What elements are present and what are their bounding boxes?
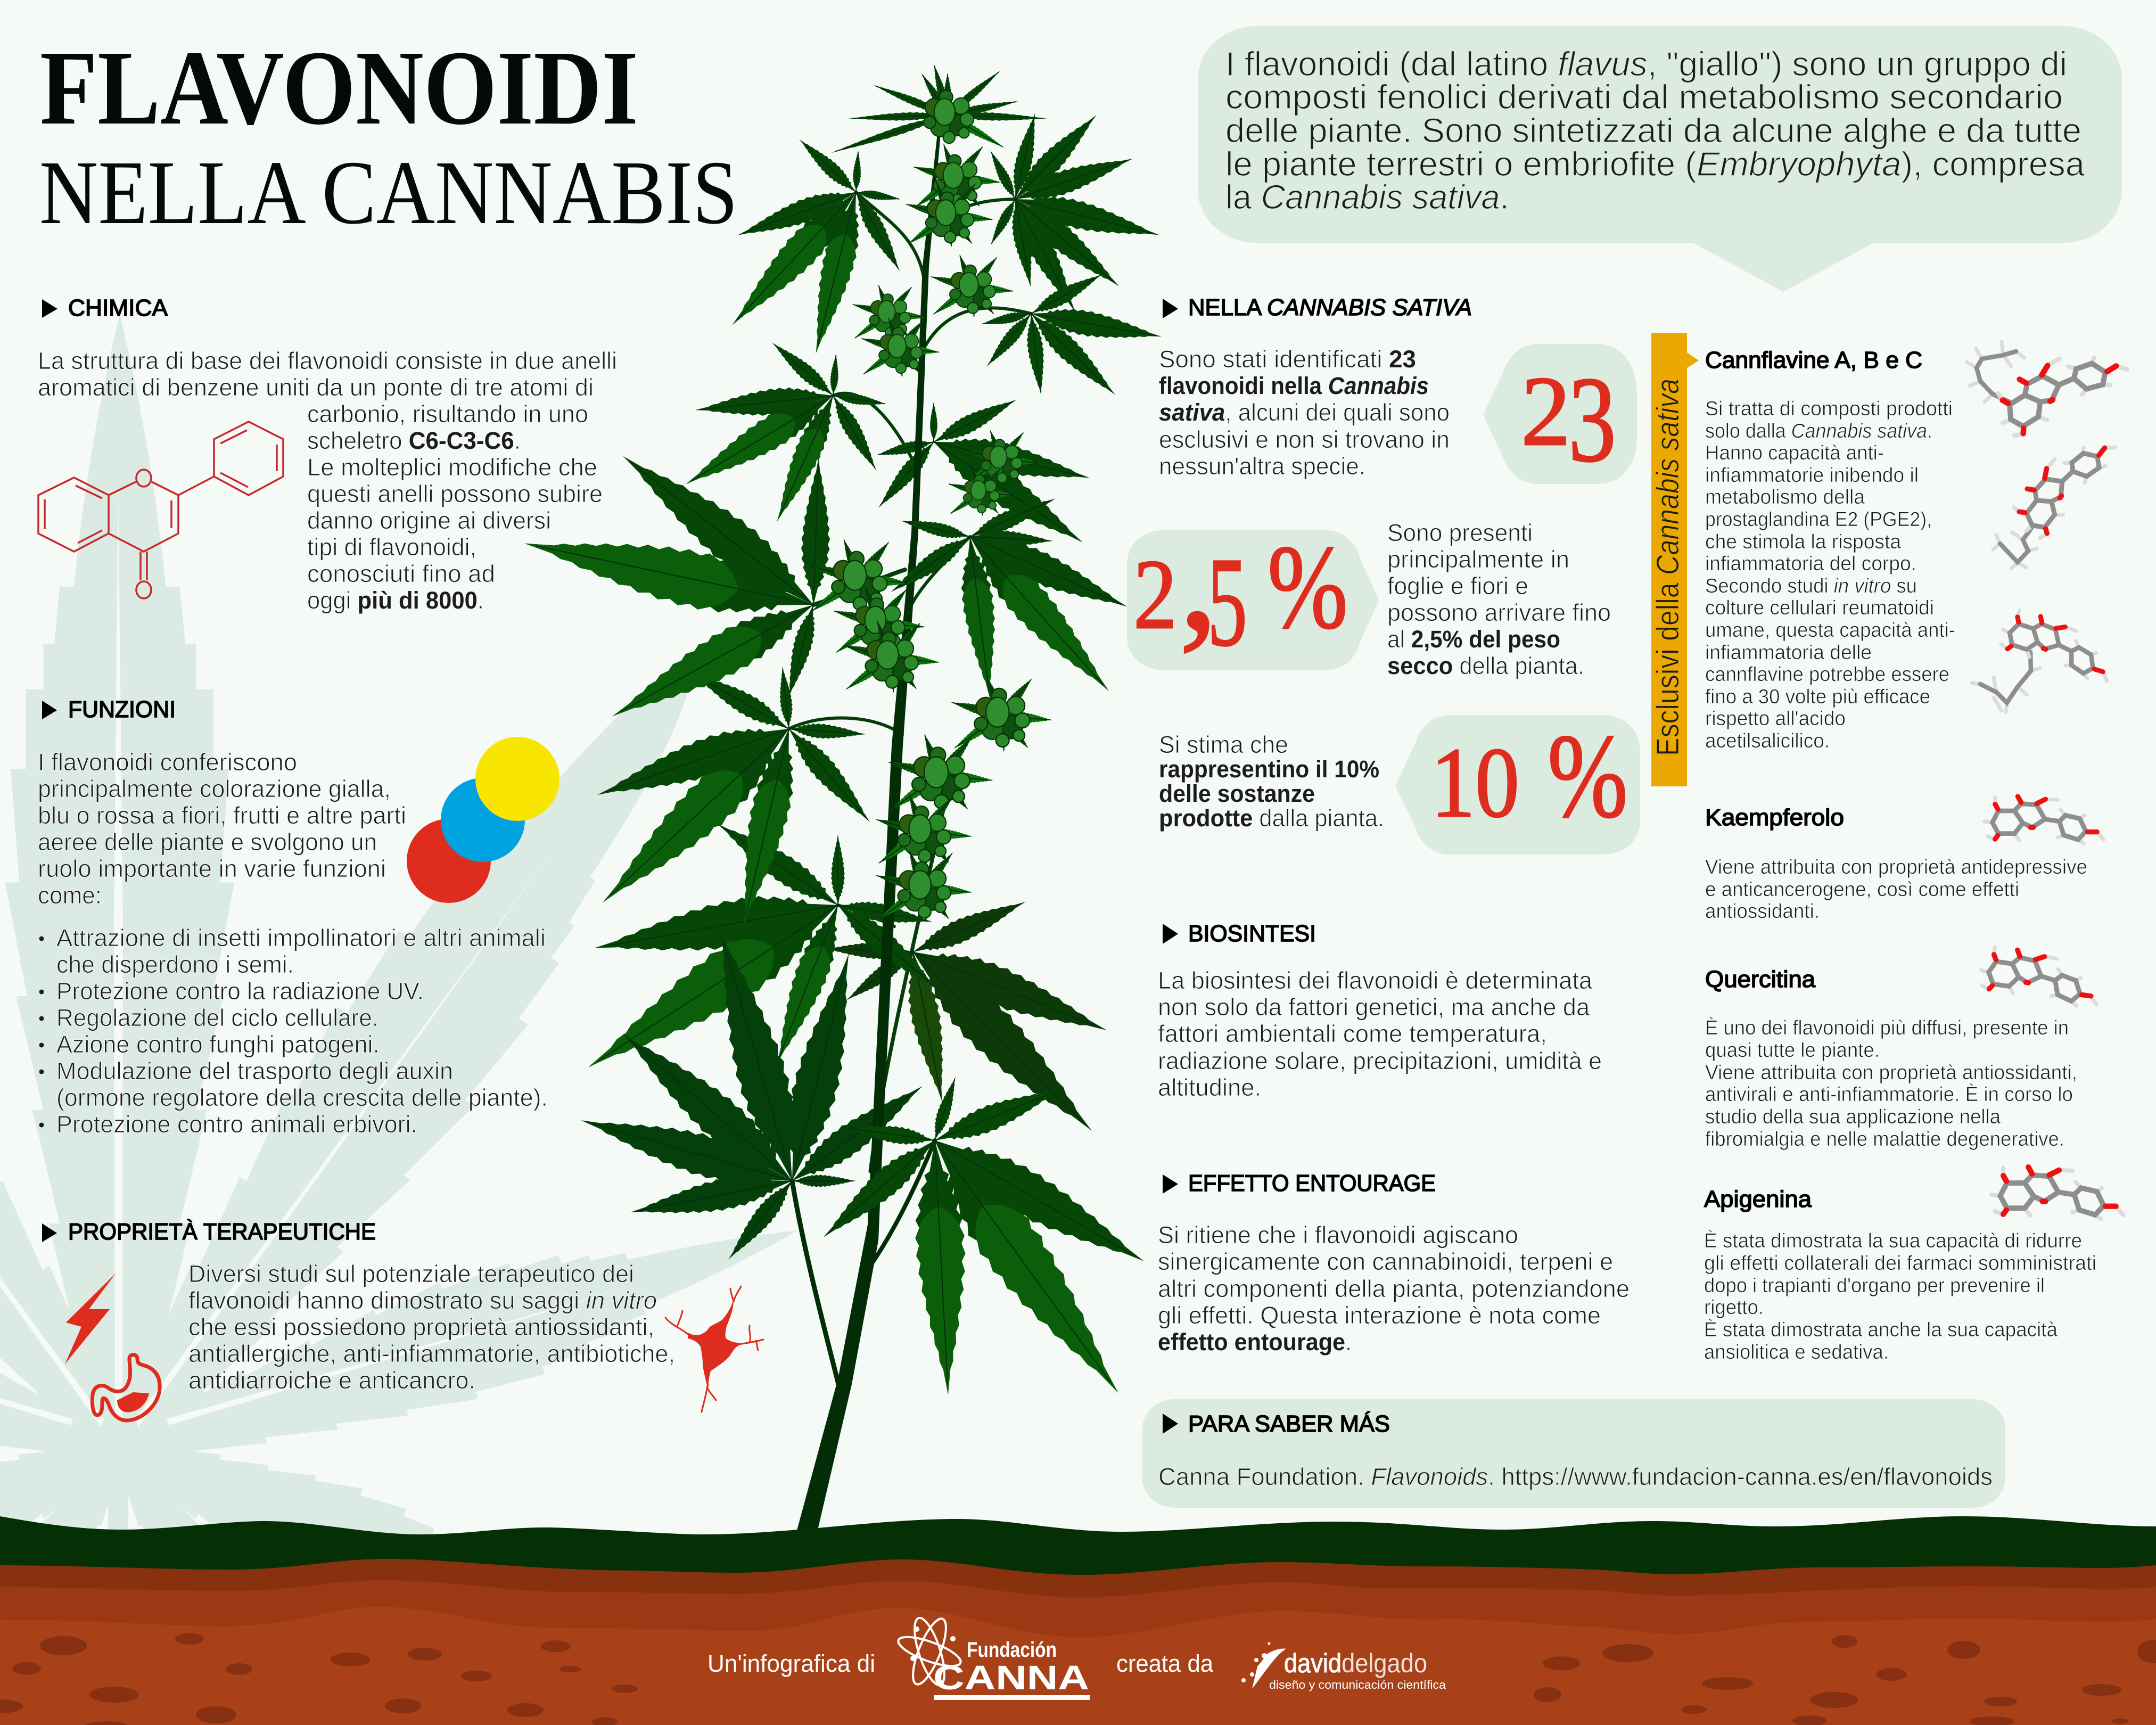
right column: cannflavine: Secondo studi in vitro su [1705, 575, 1917, 597]
title [39, 29, 738, 243]
molecule: apigenina [1992, 1167, 2123, 1219]
flower buds [807, 142, 1053, 924]
section: proprietà terapeutiche: PROPRIETÀ TERAPEUTICHE [68, 1219, 376, 1245]
title: FLAVONOIDI [40, 29, 638, 147]
section: chimica: scheletro C6-C3-C6. [307, 427, 521, 454]
section: nella cannabis sativa [1159, 294, 1472, 480]
intro speech bubble: I flavonoidi (dal latino flavus, "giallo") sono un gruppo di [1225, 45, 2067, 83]
section: funzioni: FUNZIONI [68, 696, 176, 722]
icon: colour circles [407, 737, 559, 903]
molecule: cannflavine A [1967, 328, 2129, 444]
section: funzioni [38, 696, 548, 1138]
section: biosintesi: altitudine. [1158, 1074, 1261, 1101]
section: effetto entourage [1158, 1170, 1630, 1356]
right column: cannflavine: fino a 30 volte più efficace [1705, 686, 1930, 708]
soil stones [0, 1633, 2156, 1725]
right column: quercitina [1705, 966, 2077, 1151]
section: effetto entourage: sinergicamente con cannabinoidi, terpeni e [1158, 1248, 1613, 1275]
text block: peso secco: Sono presenti [1387, 519, 1533, 546]
section: nella cannabis sativa: esclusivi e non si trovano in [1159, 426, 1450, 453]
right column: quercitina: Viene attribuita con proprietà antiossidanti, [1705, 1062, 2077, 1084]
callout: 23: 3 [1568, 351, 1616, 487]
text block: peso secco: principalmente in [1387, 546, 1569, 573]
right column: cannflavine: metabolismo della [1705, 486, 1865, 508]
right column: cannflavine: umane, questa capacità anti- [1705, 619, 1955, 642]
right column: cannflavine: acetilsalicilico. [1705, 730, 1830, 752]
text block: peso secco [1387, 519, 1611, 679]
right column: cannflavine: rispetto all'acido [1705, 708, 1846, 730]
text block: 10 percento [1159, 731, 1384, 832]
right column: cannflavine: infiammatoria del corpo. [1705, 553, 1916, 575]
section: chimica: carbonio, risultando in uno [307, 400, 588, 428]
main stem [796, 133, 941, 1532]
credits [707, 1650, 1214, 1677]
intro speech bubble: composti fenolici derivati dal metabolismo secondario [1225, 78, 2063, 116]
right column: apigenina: È stata dimostrata la sua capacità di ridurre [1704, 1229, 2082, 1252]
callout: 2,5 %: % [1268, 520, 1348, 653]
section: funzioni: (ormone regolatore della crescita delle piante). [56, 1084, 548, 1111]
callout: 23 [1483, 344, 1637, 487]
flavone skeleton diagram [38, 422, 283, 598]
callout: 2,5 % [1127, 486, 1379, 672]
right column: cannflavine: cannflavine potrebbe essere [1705, 663, 1949, 686]
section: effetto entourage: EFFETTO ENTOURAGE [1188, 1170, 1436, 1196]
right column: cannflavine: Cannflavine A, B e C [1705, 347, 1922, 373]
section: nella cannabis sativa: nessun'altra specie. [1159, 453, 1365, 480]
section: chimica: oggi più di 8000. [307, 587, 484, 614]
right column: cannflavine: solo dalla Cannabis sativa. [1705, 420, 1932, 442]
text block: peso secco: al 2,5% del peso [1387, 626, 1560, 653]
section: chimica: danno origine ai diversi [307, 507, 551, 534]
right column: cannflavine: che stimola la risposta [1705, 531, 1902, 553]
right column: apigenina: gli effetti collaterali dei farmaci somministrati [1704, 1252, 2096, 1275]
section: funzioni: Protezione contro la radiazione UV. [56, 978, 424, 1005]
right column: quercitina: quasi tutte le piante. [1705, 1039, 1880, 1062]
intro speech bubble: delle piante. Sono sintetizzati da alcune alghe e da tutte [1225, 111, 2081, 150]
section: proprietà terapeutiche: flavonoidi hanno dimostrato su saggi in vitro [188, 1287, 657, 1314]
section: chimica: CHIMICA [68, 295, 168, 321]
text block: peso secco: possono arrivare fino [1387, 599, 1611, 626]
section: biosintesi: fattori ambientali come temperatura, [1158, 1020, 1547, 1047]
ground layers [0, 1516, 2156, 1725]
section: funzioni: Attrazione di insetti impollinatori e altri animali [56, 924, 546, 951]
section: funzioni: blu o rossa a fiori, frutti e altre parti [38, 802, 406, 829]
right column: apigenina: dopo i trapianti d'organo per prevenire il [1704, 1275, 2045, 1297]
section: chimica: aromatici di benzene uniti da un ponte di tre atomi di [38, 374, 594, 401]
text block: peso secco: foglie e fiori e [1387, 572, 1528, 599]
intro speech bubble: le piante terrestri o embriofite ( Embryophyta), compresa [1225, 145, 2085, 183]
logo: David Delgado: daviddelgado [1284, 1648, 1427, 1678]
callout: 10 %: % [1548, 709, 1628, 842]
icon: lightning bolt [65, 1273, 116, 1364]
section: nella cannabis sativa: sativa, alcuni dei quali sono [1159, 399, 1450, 426]
section: biosintesi: BIOSINTESI [1188, 921, 1316, 947]
logo: David Delgado [1241, 1642, 1446, 1691]
right column: cannflavine: infiammatorie inibendo il [1705, 464, 1919, 487]
section: funzioni: Regolazione del ciclo cellulare. [56, 1004, 378, 1031]
molecule: cannflavine C [1972, 607, 2119, 712]
section: funzioni: che disperdono i semi. [56, 951, 294, 978]
panel: para saber más: PARA SABER MÁS [1188, 1411, 1390, 1437]
right column: quercitina: studio della sua applicazione nella [1705, 1106, 2001, 1128]
orange label bar [1650, 333, 1699, 786]
right column: apigenina [1704, 1186, 2096, 1363]
logo: Fundación Canna: CANNA [933, 1658, 1089, 1697]
section: proprietà terapeutiche [42, 1219, 675, 1394]
leaf group behind the stem [789, 192, 1031, 1171]
section: proprietà terapeutiche: antidiarroiche e anticancro. [188, 1367, 475, 1394]
section: effetto entourage: altri componenti della pianta, potenziandone [1158, 1275, 1630, 1302]
section: nella cannabis sativa: Sono stati identificati 23 [1159, 346, 1416, 373]
credits: Un'infografica di [707, 1650, 875, 1677]
right column: kaempferolo: antiossidanti. [1705, 900, 1820, 923]
right column: quercitina: antivirali e anti-infiammatorie. È in corso lo [1705, 1083, 2073, 1106]
callout: 10 %: 10 [1431, 727, 1519, 838]
cannabis plant [519, 62, 1164, 1532]
right column: kaempferolo: Viene attribuita con proprietà antidepressive [1705, 856, 2087, 878]
section: biosintesi: radiazione solare, precipitazioni, umidità e [1158, 1047, 1602, 1074]
section: funzioni: Azione contro funghi patogeni. [56, 1031, 380, 1058]
section: effetto entourage: gli effetti. Questa interazione è nota come [1158, 1302, 1601, 1329]
section: nella cannabis sativa: flavonoidi nella Cannabis [1159, 372, 1429, 399]
right column: cannflavine: colture cellulari reumatoidi [1705, 597, 1934, 619]
section: chimica: Le molteplici modifiche che [307, 454, 597, 481]
right column: quercitina: fibromialgia e nelle malattie degenerative. [1705, 1128, 2064, 1151]
callout: 2,5 %: , [1179, 486, 1219, 663]
section: chimica: tipi di flavonoidi, [307, 533, 476, 561]
molecule: quercitina [1978, 946, 2102, 1008]
leaf group in front of the stem [792, 1140, 935, 1384]
section: funzioni: Protezione contro animali erbivori. [56, 1111, 417, 1138]
callout: 23: 2 [1521, 356, 1570, 466]
right column: apigenina: ansiolitica e sedativa. [1704, 1341, 1889, 1363]
section: biosintesi [1158, 921, 1602, 1101]
section: proprietà terapeutiche: antiallergiche, anti-infiammatorie, antibiotiche, [188, 1340, 675, 1367]
right column: cannflavine: Si tratta di composti prodotti [1705, 398, 1953, 420]
intro speech bubble: la Cannabis sativa. [1225, 178, 1509, 216]
text block: 10 percento: Si stima che [1159, 731, 1288, 758]
section: funzioni: come: [38, 882, 102, 909]
text block: 10 percento: rappresentino il 10% [1159, 755, 1379, 783]
section: funzioni: aeree delle piante e svolgono un [38, 828, 377, 856]
right column: quercitina: Quercitina [1705, 966, 1816, 992]
right column: kaempferolo [1705, 804, 2087, 923]
section: proprietà terapeutiche: che essi possiedono proprietà antiossidanti, [188, 1313, 654, 1341]
right column: quercitina: È uno dei flavonoidi più diffusi, presente in [1705, 1016, 2069, 1039]
right column: kaempferolo: e anticancerogene, così come effetti [1705, 878, 2019, 901]
icon: stomach [92, 1354, 160, 1420]
right column: kaempferolo: Kaempferolo [1705, 804, 1844, 831]
section: biosintesi: non solo da fattori genetici, ma anche da [1158, 993, 1590, 1021]
panel: para saber más: Canna Foundation. Flavonoids. https://www.fundacion-canna.es/en/flavonoids [1158, 1463, 1993, 1490]
callout: 2,5 %: 5 [1207, 531, 1247, 672]
right column: cannflavine [1705, 347, 1955, 752]
right column: cannflavine: Hanno capacità anti- [1705, 442, 1884, 464]
title: NELLA CANNABIS [39, 142, 738, 243]
logo: David Delgado: diseño y comunicación científica [1269, 1678, 1446, 1691]
decorative background leaf [0, 314, 817, 1725]
right column: apigenina: Apigenina [1704, 1186, 1812, 1212]
right column: apigenina: rigetto. [1704, 1296, 1764, 1319]
text block: 10 percento: delle sostanze [1159, 780, 1315, 807]
intro speech bubble [1198, 26, 2122, 292]
section: biosintesi: La biosintesi dei flavonoidi è determinata [1158, 967, 1593, 994]
right column: apigenina: È stata dimostrata anche la sua capacità [1704, 1318, 2058, 1341]
section: effetto entourage: Si ritiene che i flavonoidi agiscano [1158, 1221, 1518, 1248]
top flower spikes [829, 62, 1048, 157]
section: chimica [38, 295, 617, 614]
logo: Fundación Canna [895, 1615, 1090, 1700]
text block: peso secco: secco della pianta. [1387, 652, 1584, 679]
molecule: cannflavine B [1993, 421, 2118, 569]
section: chimica: conosciuti fino ad [307, 560, 495, 587]
right column: cannflavine: prostaglandina E2 (PGE2), [1705, 508, 1932, 531]
section: chimica: La struttura di base dei flavonoidi consiste in due anelli [38, 347, 617, 374]
section: effetto entourage: effetto entourage. [1158, 1328, 1352, 1356]
section: funzioni: Modulazione del trasporto degli auxin [56, 1057, 453, 1085]
right column: cannflavine: infiammatoria delle [1705, 642, 1872, 664]
text block: 10 percento: prodotte dalla pianta. [1159, 804, 1384, 832]
section: proprietà terapeutiche: Diversi studi sul potenziale terapeutico dei [188, 1260, 634, 1287]
panel: para saber más [1142, 1399, 2005, 1508]
logo: Fundación Canna: Fundación [967, 1638, 1057, 1662]
section: chimica: questi anelli possono subire [307, 480, 603, 507]
credits: creata da [1116, 1650, 1214, 1677]
orange label bar: Esclusivi della Cannabis sativa [1650, 379, 1685, 756]
icon: neuron [665, 1286, 763, 1412]
callout: 2,5 %: 2 [1133, 539, 1177, 650]
section: funzioni: I flavonoidi conferiscono [38, 749, 297, 776]
section: funzioni: ruolo importante in varie funzioni [38, 855, 386, 882]
molecule: kaempferolo [1985, 796, 2104, 843]
section: funzioni: principalmente colorazione gialla, [38, 775, 391, 802]
section: nella cannabis sativa: NELLA CANNABIS SATIVA [1188, 294, 1472, 321]
callout: 10 % [1395, 709, 1640, 855]
